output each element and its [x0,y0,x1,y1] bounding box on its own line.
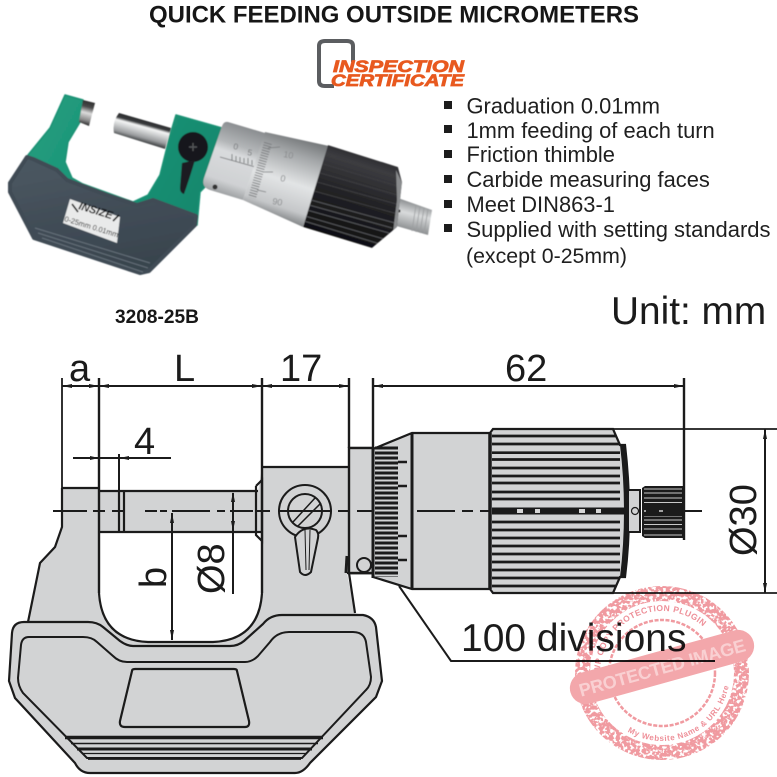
feature: feeding: 1mm feeding of each turn [466,118,715,143]
drawing: center line [53,510,702,512]
drawing: throat [99,593,262,642]
logo: inspection certificate: INSPECTION [333,57,465,76]
drawing: rubber pad inner [18,632,371,758]
drawing: thimble graduations [375,446,398,577]
dimension: diameter 30: Ø30 [723,484,765,556]
dimension: a: a [69,348,91,390]
dimension: b [133,513,175,640]
dimension: diameter 30 [723,429,767,593]
model number: 3208-25B [115,307,199,328]
watermark: speckled ring [582,594,742,752]
drawing: spindle [99,480,262,541]
dimension: 62: 62 [505,348,547,390]
photo: spindle [114,113,171,149]
feature: standard: Meet DIN863-1 [466,192,615,217]
photo: sleeve [203,122,265,200]
photo: pad label [63,199,120,243]
drawing: frame outline [28,448,373,622]
photo: anvil [79,100,95,126]
watermark: inner ring [609,620,715,726]
drawing: long ticks [398,462,407,560]
photo: ratchet [393,198,432,235]
callout: 100 divisions: 100 divisions [461,617,686,660]
product photo: micrometer [10,95,432,273]
watermark: top text: WP COPY PROTECTION PLUGIN [594,605,706,670]
photo: sleeve scale: 0 [233,141,239,152]
title: QUICK FEEDING OUTSIDE MICROMETERS [149,2,639,28]
dimension: diameter 8 [191,492,235,594]
drawing: rubber pad outer [9,615,382,773]
photo: sleeve scale: 5 [247,147,253,158]
drawing: pad label plate [120,669,249,727]
photo: sleeve scale [212,141,273,190]
drawing: extension lines [99,378,684,593]
unit label: Unit: mm [611,290,766,333]
drawing: knurled knob [490,429,629,593]
feature: graduation: Graduation 0.01mm [466,94,660,118]
drawing: knob marks [517,509,601,513]
photo: pad ridges [35,228,150,272]
callout: 100 divisions [399,586,715,661]
drawing: frame [9,448,382,773]
dimension: 4: 4 [134,421,155,463]
photo: pad label: INSIZE [77,200,115,222]
feature list [444,94,771,268]
technical drawing [9,348,777,773]
dimension: diameter 8: Ø8 [191,543,233,594]
dimension: 17: 17 [280,348,322,390]
photo: thimble scale: 90 [272,196,283,208]
watermark: band: PROTECTED IMAGE [577,635,748,701]
photo: thimble [243,132,329,227]
photo: green frame [28,95,222,225]
feature: thimble: Friction thimble [466,142,615,167]
photo: pad label: 0-25mm 0.01mm [63,214,120,239]
dimension: L: L [174,348,195,390]
watermark: bottom text: My Website Name & URL Here [628,686,728,741]
dimension: top row arrows [62,384,684,388]
drawing: barrel [346,448,373,573]
drawing: knob cap [620,445,629,577]
drawing: thin extension lines [62,378,777,593]
logo: inspection certificate [319,41,465,90]
drawing: pad ridges [65,738,323,758]
dimension: b: b [133,567,175,588]
photo: thimble scale: 0 [280,173,286,184]
photo: lock lever [178,132,208,194]
feature: exception note: (except 0-25mm) [466,244,627,268]
photo: thimble scale [252,143,294,208]
bullet icons [444,101,452,232]
photo: knurled knob [303,145,403,248]
dimension: top row lines [62,385,684,387]
feature: measuring faces: Carbide measuring faces [466,167,710,192]
feature: setting standards: Supplied with setting standards [466,217,771,242]
dimension: 4 [73,421,171,532]
photo: rubber pad [10,157,196,273]
drawing: ratchet [628,486,684,538]
drawing: spindle lock [279,485,331,575]
drawing: thimble [373,433,490,589]
watermark stamp [570,586,754,760]
photo: thimble scale: 10 [283,149,294,161]
logo: inspection certificate: CERTIFICATE [331,71,465,90]
